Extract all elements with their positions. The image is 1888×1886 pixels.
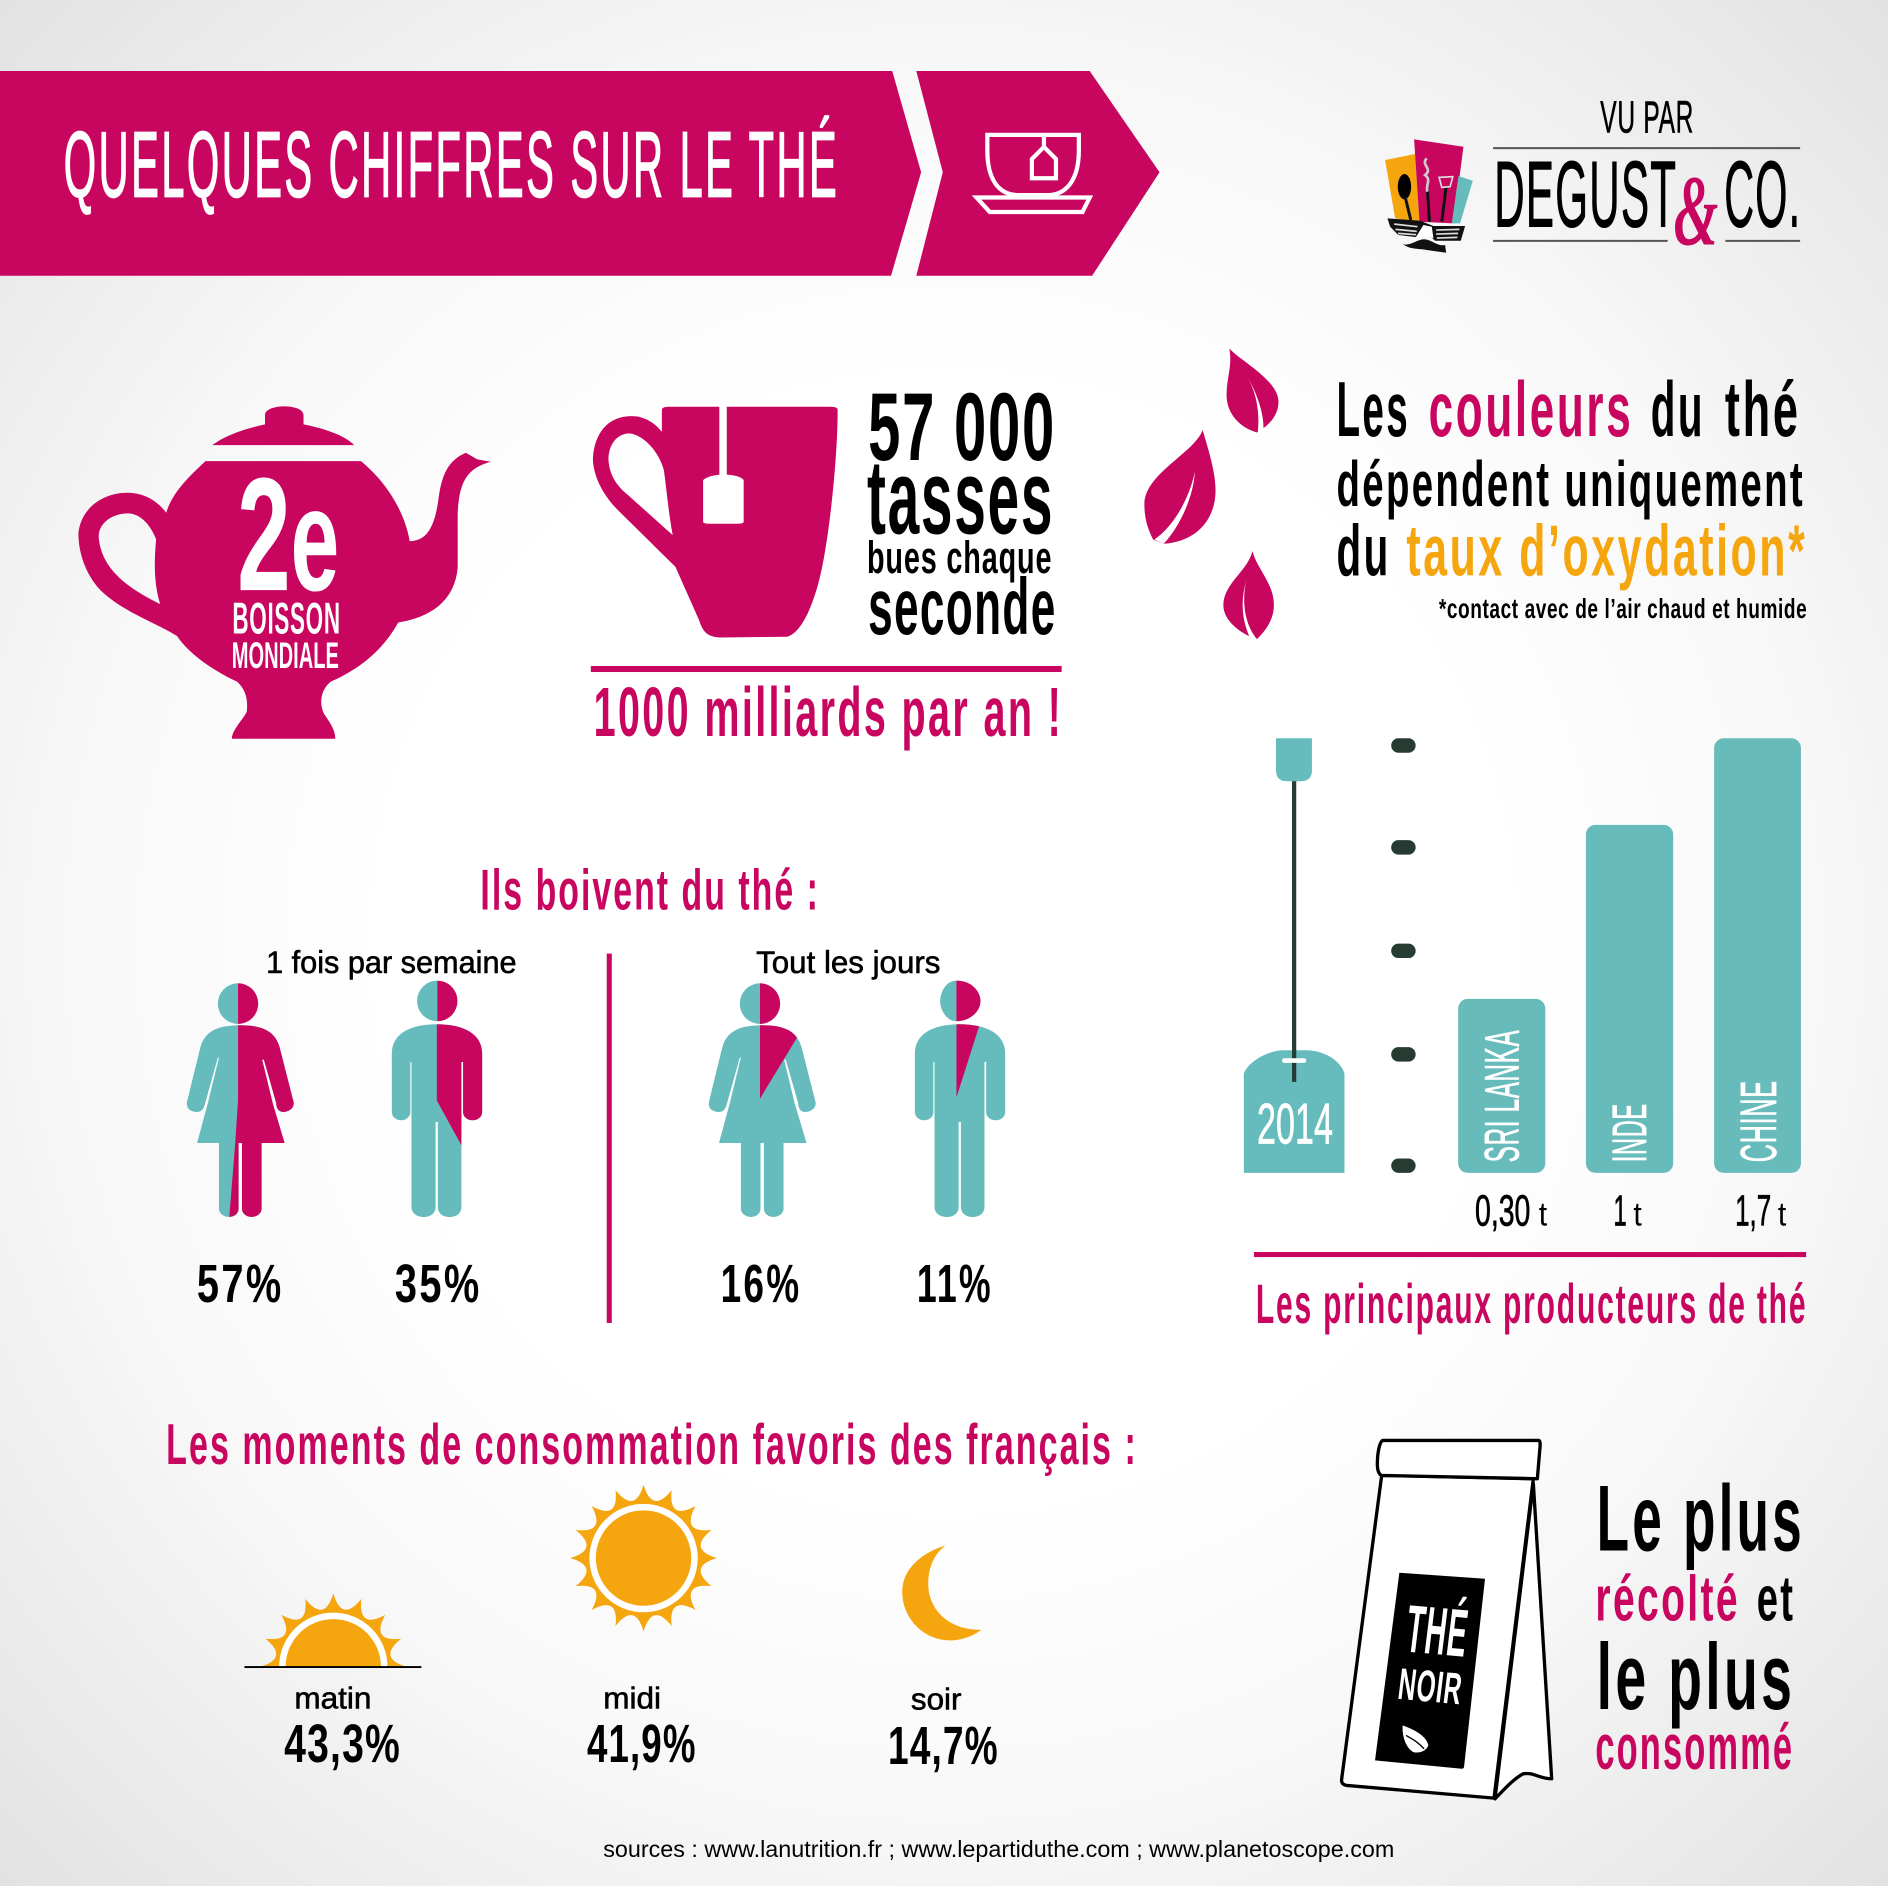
subheading: daily: Tout les jours bbox=[756, 945, 940, 980]
ampersand: & bbox=[1674, 154, 1718, 266]
stat: seconde: seconde bbox=[868, 562, 1057, 651]
label: mondiale: MONDIALE bbox=[232, 634, 339, 676]
bar: Sri Lanka: SRI LANKA bbox=[1475, 1030, 1529, 1162]
value: midi: 41,9% bbox=[587, 1714, 697, 1774]
label: soir: soir bbox=[911, 1683, 961, 1716]
value: 0,30 t: t bbox=[1539, 1195, 1548, 1233]
teapot panel bbox=[78, 406, 491, 739]
vu par: VU PAR bbox=[1600, 91, 1694, 142]
icon: moon bbox=[902, 1545, 981, 1640]
statement: récolté et: récolté bbox=[1595, 1562, 1740, 1634]
stat: 57 000: 57 000 bbox=[868, 374, 1056, 481]
figure: woman 57% bbox=[187, 983, 294, 1217]
bar: Chine bbox=[1714, 738, 1801, 1173]
moments panel bbox=[166, 1413, 1138, 1776]
value: 1,7 t: 1,7 bbox=[1735, 1187, 1771, 1235]
axis ticks bbox=[1391, 738, 1416, 1173]
icon: tea bag year tag bbox=[1244, 738, 1344, 1173]
heading: line 1: thé bbox=[1725, 365, 1801, 453]
logo rules bbox=[1493, 148, 1800, 241]
heading: Ils boivent du thé : bbox=[480, 858, 820, 922]
icon: tea bag package bbox=[1342, 1440, 1552, 1799]
stat: per year: 1000 milliards par an ! bbox=[594, 673, 1063, 751]
value: 1 t: 1 bbox=[1613, 1187, 1627, 1235]
icon: noon sun bbox=[570, 1485, 717, 1632]
label: midi: midi bbox=[603, 1683, 661, 1716]
value: 16%: 16% bbox=[721, 1254, 801, 1314]
value: 1,7 t: t bbox=[1778, 1195, 1787, 1233]
header banner bbox=[0, 71, 1160, 276]
banner: arrow tip bbox=[916, 71, 1160, 276]
rank number: 2e bbox=[237, 445, 339, 625]
cups per second panel bbox=[591, 374, 1063, 751]
icon: tea bag package: THÉ bbox=[1402, 1592, 1472, 1672]
black tea panel bbox=[1342, 1440, 1805, 1799]
value: 11%: 11% bbox=[917, 1254, 993, 1314]
figure: woman 16% bbox=[709, 983, 816, 1217]
icon: teapot bbox=[78, 406, 491, 739]
heading: line 1: couleurs bbox=[1429, 365, 1633, 453]
value: 57%: 57% bbox=[197, 1254, 284, 1314]
value: soir: 14,7% bbox=[888, 1716, 999, 1776]
figures bbox=[187, 981, 1005, 1217]
heading: Les moments de consommation favoris des français : bbox=[166, 1413, 1138, 1477]
icon: mug with tea bag bbox=[593, 406, 838, 637]
icon: tea bag year tag: 2014 bbox=[1257, 1093, 1333, 1157]
stat: tasses: tasses bbox=[867, 439, 1054, 557]
heading: line 1: du bbox=[1651, 365, 1705, 453]
bar: Chine: CHINE bbox=[1730, 1080, 1787, 1162]
colours panel bbox=[1144, 348, 1807, 639]
label: matin: matin bbox=[294, 1683, 371, 1716]
icon: rising sun bbox=[244, 1594, 422, 1668]
value: 0,30 t: 0,30 bbox=[1475, 1187, 1530, 1235]
icon: tea leaves bbox=[1144, 348, 1278, 639]
icon: tea cup bbox=[977, 135, 1090, 212]
sources: sources : www.lanutrition.fr ; www.lepartiduthe.com ; www.planetoscope.com bbox=[603, 1836, 1394, 1862]
value: 35%: 35% bbox=[395, 1254, 482, 1314]
statement: récolté et: et bbox=[1757, 1562, 1795, 1634]
subheading: weekly: 1 fois par semaine bbox=[266, 945, 517, 980]
header banner: QUELQUES CHIFFRES SUR LE THÉ bbox=[64, 112, 839, 216]
figure: man 11% bbox=[915, 981, 1005, 1217]
bar: Sri Lanka bbox=[1458, 999, 1545, 1173]
stat: bues chaque: bues chaque bbox=[867, 532, 1052, 583]
label: boisson: BOISSON bbox=[232, 594, 341, 643]
bar: Inde bbox=[1586, 825, 1673, 1173]
bar: Inde: INDE bbox=[1603, 1103, 1657, 1162]
figure: man 35% bbox=[392, 981, 482, 1217]
banner: title ribbon bbox=[0, 71, 921, 276]
value: 1 t: t bbox=[1633, 1195, 1642, 1233]
label: noir: NOIR bbox=[1396, 1660, 1465, 1714]
logo icon bbox=[1385, 139, 1473, 253]
heading: line 3: du bbox=[1337, 512, 1391, 592]
drinkers panel bbox=[187, 858, 1005, 1323]
heading: line 1: Les bbox=[1337, 365, 1410, 453]
value: matin: 43,3% bbox=[284, 1714, 401, 1774]
logo: Degust & Co bbox=[1385, 91, 1801, 266]
producers bar chart bbox=[1244, 738, 1807, 1335]
